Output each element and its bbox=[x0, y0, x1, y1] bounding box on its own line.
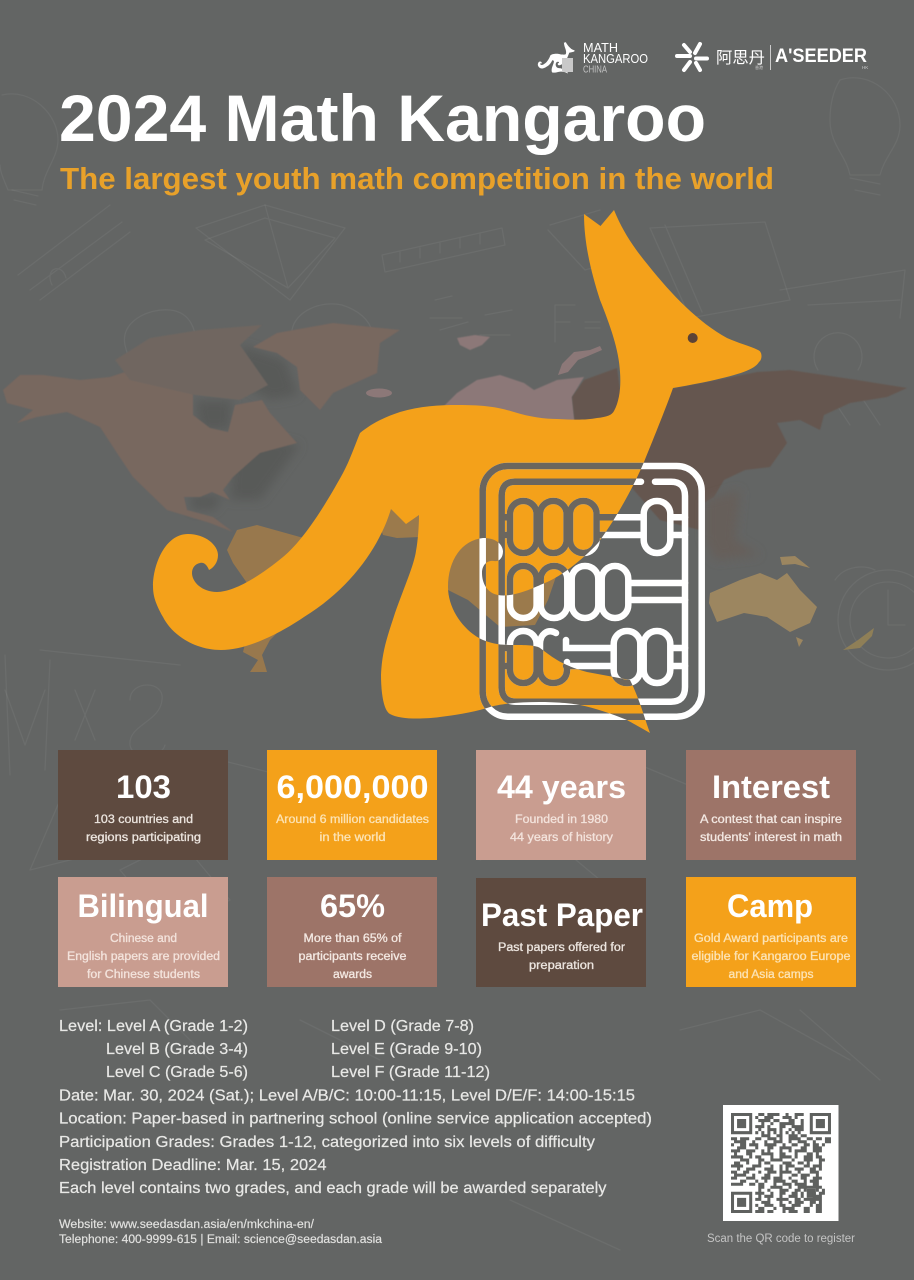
logo: math kangaroo china: KANGAROO bbox=[583, 51, 648, 66]
card: past paper: preparation bbox=[529, 960, 594, 972]
competition details: Level F (Grade 11-12) bbox=[331, 1064, 490, 1081]
logo: aseeder wordmark: A'SEEDER bbox=[775, 46, 867, 67]
subtitle: The largest youth math competition in the world bbox=[60, 162, 774, 196]
card: past paper bbox=[476, 878, 646, 987]
logo: aseeder wordmark: 阿思丹 bbox=[716, 49, 765, 67]
card: camp: and Asia camps bbox=[728, 969, 814, 981]
card: 44 years: 44 years of history bbox=[510, 832, 613, 844]
card: camp: eligible for Kangaroo Europe bbox=[692, 951, 850, 963]
region: south east asia bbox=[705, 490, 760, 560]
logo: math kangaroo china: CHINA bbox=[583, 64, 607, 76]
continent: arctic islands bbox=[115, 325, 268, 400]
card: 6,000,000 candidates: in the world bbox=[320, 832, 386, 844]
qr caption: Scan the QR code to register bbox=[707, 1233, 855, 1245]
continent: europe bbox=[440, 375, 584, 425]
competition details: Level D (Grade 7-8) bbox=[331, 1018, 474, 1035]
card: camp bbox=[686, 877, 856, 987]
competition details bbox=[59, 1018, 652, 1197]
contact details: Website: www.seedasdan.asia/en/mkchina-en/ bbox=[59, 1219, 315, 1231]
card: 65% bbox=[267, 877, 437, 987]
continent: south america bbox=[227, 525, 340, 672]
ocean shading bbox=[190, 345, 300, 510]
kangaroo body bbox=[153, 210, 762, 733]
card: 6,000,000 candidates bbox=[267, 750, 437, 860]
continent: north america bbox=[3, 372, 297, 532]
card: camp: Camp bbox=[727, 888, 813, 924]
abacus bbox=[483, 466, 702, 717]
card: bilingual: English papers are provided bbox=[67, 951, 220, 963]
logo: aseeder star icon bbox=[677, 44, 707, 70]
card: bilingual: for Chinese students bbox=[87, 969, 200, 981]
card: 65%: More than 65% of bbox=[304, 933, 402, 945]
card: bilingual: Chinese and bbox=[110, 933, 177, 945]
kangaroo with abacus bbox=[153, 210, 762, 733]
island: new zealand bbox=[843, 628, 874, 650]
competition details: Registration Deadline: Mar. 15, 2024 bbox=[59, 1157, 327, 1174]
qr code bbox=[723, 1105, 838, 1221]
card: interest: A contest that can inspire bbox=[700, 814, 842, 826]
card: 103 countries: regions participating bbox=[86, 832, 201, 844]
card: bilingual: Bilingual bbox=[78, 888, 208, 924]
continent: asia bbox=[572, 368, 907, 530]
card: 65%: 65% bbox=[320, 888, 385, 924]
competition details: Date: Mar. 30, 2024 (Sat.); Level A/B/C: 10:00-11:15, Level D/E/F: 14:00-15:15 bbox=[59, 1088, 635, 1104]
title: 2024 Math Kangaroo bbox=[59, 81, 706, 155]
card: bilingual bbox=[58, 877, 228, 987]
logo: aseeder wordmark bbox=[716, 45, 868, 70]
card: 103 countries bbox=[58, 750, 228, 860]
island: new guinea bbox=[780, 556, 810, 568]
competition details: Level: Level A (Grade 1-2) bbox=[59, 1018, 248, 1035]
contact details bbox=[59, 1219, 383, 1246]
card: 44 years: 44 years bbox=[497, 769, 626, 805]
card: camp: Gold Award participants are bbox=[694, 933, 848, 945]
card: 6,000,000 candidates: Around 6 million candidates bbox=[276, 814, 429, 826]
card: past paper: Past Paper bbox=[481, 897, 643, 933]
peninsula: scandinavia bbox=[558, 346, 602, 375]
card: interest: students' interest in math bbox=[700, 832, 842, 844]
logos bbox=[538, 40, 868, 76]
card: 65%: participants receive bbox=[298, 951, 406, 963]
island: svalbard bbox=[457, 335, 490, 350]
card: 65%: awards bbox=[333, 969, 372, 981]
competition details: Participation Grades: Grades 1-12, categorized into six levels of difficulty bbox=[59, 1134, 595, 1151]
continent: africa bbox=[372, 505, 560, 627]
card: 6,000,000 candidates: 6,000,000 bbox=[276, 769, 428, 805]
world map bbox=[3, 323, 907, 672]
logo: math kangaroo china bbox=[538, 40, 648, 76]
competition details: Level C (Grade 5-6) bbox=[106, 1064, 248, 1081]
card: interest bbox=[686, 750, 856, 860]
card: interest: Interest bbox=[712, 769, 830, 805]
kangaroo eye bbox=[688, 333, 698, 343]
card: 44 years bbox=[476, 750, 646, 860]
contact details: Telephone: 400-9999-615 | Email: science@seedasdan.asia bbox=[59, 1234, 383, 1246]
continent: greenland bbox=[253, 323, 400, 410]
competition details: Level B (Grade 3-4) bbox=[106, 1041, 248, 1058]
card: 44 years: Founded in 1980 bbox=[515, 814, 608, 826]
competition details: Each level contains two grades, and each grade will be awarded separately bbox=[59, 1180, 607, 1197]
card: 103 countries: 103 countries and bbox=[94, 814, 193, 826]
continent: australia bbox=[709, 573, 817, 632]
card: 103 countries: 103 bbox=[116, 769, 171, 805]
logo: aseeder wordmark: 香港 bbox=[755, 64, 763, 70]
card: past paper: Past papers offered for bbox=[498, 942, 625, 954]
competition details: Location: Paper-based in partnering school (online service application accepted) bbox=[59, 1110, 652, 1128]
island: tasmania bbox=[796, 637, 803, 647]
logo: aseeder wordmark: HK bbox=[862, 65, 868, 70]
island: iceland bbox=[366, 388, 392, 398]
logo: math kangaroo china: MATH bbox=[583, 40, 618, 55]
competition details: Level E (Grade 9-10) bbox=[331, 1041, 482, 1058]
